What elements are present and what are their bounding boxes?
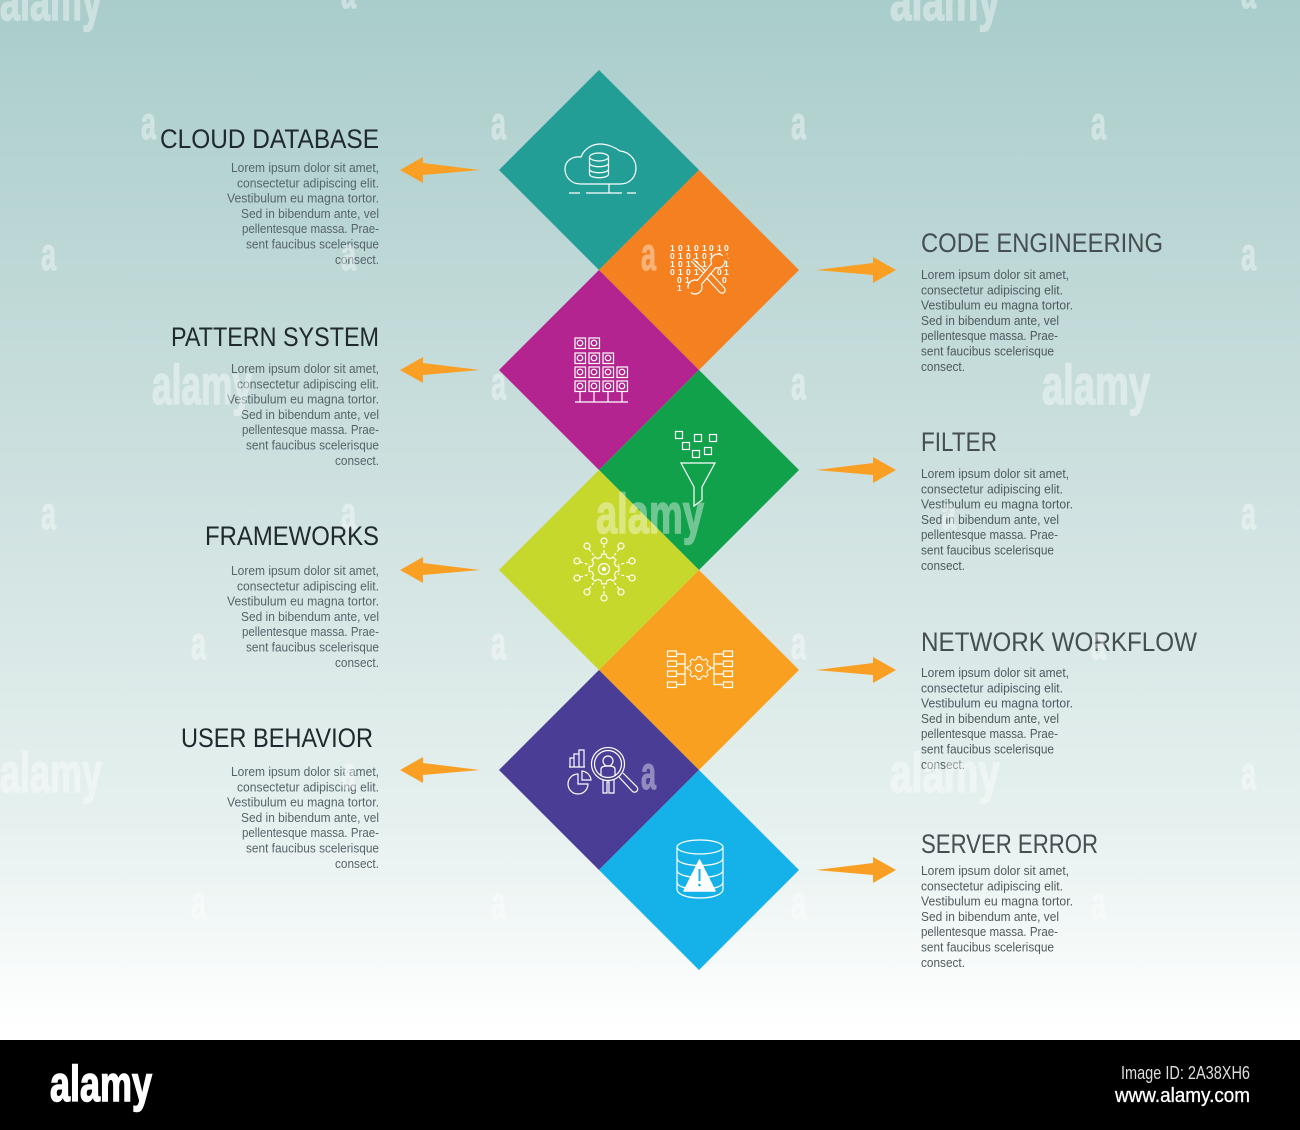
body text: Vestibulum eu magna tortor.: [921, 299, 1073, 313]
body text: Vestibulum eu magna tortor.: [227, 393, 379, 407]
body text: Lorem ipsum dolor sit amet,: [231, 765, 379, 779]
icon: cloud database: [565, 144, 636, 193]
watermark overlay: alamy: [890, 741, 1000, 804]
watermark overlay: a: [791, 97, 806, 149]
icon: pattern grid: [575, 338, 628, 402]
body text: sent faucibus scelerisque: [921, 544, 1054, 558]
watermark overlay: a: [941, 487, 956, 539]
body text: consectetur adipiscing elit.: [921, 879, 1063, 893]
body text: consect.: [921, 360, 965, 374]
image id: Image ID: 2A38XH6: [1121, 1063, 1250, 1083]
diamond: amber: [599, 570, 799, 770]
arrow: [816, 657, 896, 683]
diamond: magenta: [499, 270, 699, 470]
heading: PATTERN SYSTEM: [171, 322, 379, 352]
watermark overlay: alamy: [152, 353, 252, 416]
watermark overlay: a: [1241, 487, 1256, 539]
watermark overlay: a: [1241, 747, 1256, 799]
icon: binary code with tools: 10101010: [670, 243, 729, 253]
body text: consectetur adipiscing elit.: [237, 176, 379, 190]
arrow: [816, 457, 896, 483]
watermark overlay: a: [1091, 877, 1106, 929]
watermark overlay: a: [641, 747, 656, 799]
body text: [227, 161, 379, 267]
body text: pellentesque massa. Prae-: [921, 727, 1058, 741]
body text: sent faucibus scelerisque: [246, 438, 379, 452]
diamond: teal: [499, 70, 699, 270]
body text: pellentesque massa. Prae-: [921, 925, 1058, 939]
icon: binary code with tools: 010: [677, 275, 727, 285]
arrow: [816, 257, 896, 283]
icon: binary code with tools: 01010101: [670, 251, 729, 261]
heading: USER BEHAVIOR: [181, 723, 373, 753]
body text: consect.: [335, 656, 379, 670]
diamond: lime: [499, 470, 699, 670]
watermark overlay: a: [1091, 617, 1106, 669]
body text: Lorem ipsum dolor sit amet,: [921, 666, 1069, 680]
panel: frameworks: [205, 470, 699, 670]
body text: Sed in bibendum ante, vel: [921, 712, 1059, 726]
body text: pellentesque massa. Prae-: [242, 423, 379, 437]
body text: [227, 362, 379, 468]
watermark overlay: a: [1241, 228, 1256, 280]
watermark overlay: a: [491, 877, 506, 929]
website: www.alamy.com: [1114, 1085, 1250, 1107]
body text: Sed in bibendum ante, vel: [241, 207, 379, 221]
heading: NETWORK WORKFLOW: [921, 627, 1197, 657]
body text: pellentesque massa. Prae-: [242, 222, 379, 236]
body text: Vestibulum eu magna tortor.: [227, 595, 379, 609]
body text: [921, 864, 1073, 970]
watermark overlay: a: [41, 228, 56, 280]
body text: sent faucibus scelerisque: [246, 842, 379, 856]
body text: Sed in bibendum ante, vel: [241, 811, 379, 825]
heading: SERVER ERROR: [921, 829, 1098, 859]
body text: [921, 666, 1073, 772]
icon: binary code with tools: 010101: [670, 267, 729, 277]
arrow: [400, 557, 480, 583]
body text: Lorem ipsum dolor sit amet,: [231, 161, 379, 175]
body text: pellentesque massa. Prae-: [921, 528, 1058, 542]
body text: pellentesque massa. Prae-: [242, 625, 379, 639]
body text: Vestibulum eu magna tortor.: [921, 498, 1073, 512]
body text: sent faucibus scelerisque: [246, 640, 379, 654]
panel: pattern system: [171, 270, 699, 470]
body text: consect.: [335, 253, 379, 267]
icon: workflow gear: [668, 651, 732, 688]
body text: consect.: [921, 758, 965, 772]
watermark overlay: alamy: [1042, 353, 1150, 416]
body text: consectetur adipiscing elit.: [921, 283, 1063, 297]
watermark overlay: a: [41, 487, 56, 539]
watermark overlay: alamy: [0, 741, 102, 804]
watermark overlay: a: [341, 228, 356, 280]
watermark overlay: a: [491, 617, 506, 669]
body text: consectetur adipiscing elit.: [237, 780, 379, 794]
panel: server error: [599, 770, 1098, 970]
body text: consect.: [921, 559, 965, 573]
body text: Sed in bibendum ante, vel: [241, 408, 379, 422]
watermark overlay: a: [341, 487, 356, 539]
body text: Vestibulum eu magna tortor.: [227, 796, 379, 810]
arrow: [400, 757, 480, 783]
body text: Lorem ipsum dolor sit amet,: [231, 564, 379, 578]
body text: Sed in bibendum ante, vel: [921, 910, 1059, 924]
body text: consectetur adipiscing elit.: [237, 579, 379, 593]
watermark overlay: [0, 0, 1256, 929]
watermark overlay: a: [491, 97, 506, 149]
arrow: [400, 157, 480, 183]
panel: cloud database: [160, 70, 699, 270]
body text: sent faucibus scelerisque: [921, 742, 1054, 756]
panel: code engineering: [599, 170, 1163, 374]
diamond: blue: [599, 770, 799, 970]
body text: Vestibulum eu magna tortor.: [227, 192, 379, 206]
watermark overlay: a: [341, 747, 356, 799]
watermark overlay: a: [791, 357, 806, 409]
heading: CODE ENGINEERING: [921, 228, 1163, 258]
watermark overlay: a: [1091, 97, 1106, 149]
icon: gear hub: [574, 538, 635, 601]
footer logo: alamy: [50, 1056, 152, 1112]
heading: FRAMEWORKS: [205, 521, 379, 551]
panel: filter: [599, 370, 1073, 573]
watermark overlay: a: [191, 877, 206, 929]
body text: pellentesque massa. Prae-: [242, 826, 379, 840]
heading: CLOUD DATABASE: [160, 124, 379, 154]
icon: database warning: [677, 840, 723, 898]
body text: Vestibulum eu magna tortor.: [921, 895, 1073, 909]
diamond: orange: [599, 170, 799, 370]
icon: binary code with tools: 1: [677, 283, 682, 293]
body text: sent faucibus scelerisque: [921, 344, 1054, 358]
watermark overlay: a: [491, 357, 506, 409]
body text: Lorem ipsum dolor sit amet,: [921, 467, 1069, 481]
body text: [227, 564, 379, 670]
watermark overlay: a: [191, 617, 206, 669]
panel: user behavior: [181, 670, 699, 871]
body text: Lorem ipsum dolor sit amet,: [231, 362, 379, 376]
body text: Sed in bibendum ante, vel: [921, 513, 1059, 527]
icon: user analysis: [568, 748, 638, 794]
body text: consect.: [335, 857, 379, 871]
body text: Vestibulum eu magna tortor.: [921, 697, 1073, 711]
body text: [921, 467, 1073, 573]
body text: pellentesque massa. Prae-: [921, 329, 1058, 343]
body text: [921, 268, 1073, 374]
watermark overlay: a: [791, 617, 806, 669]
watermark overlay: a: [791, 877, 806, 929]
footer bar: [0, 1040, 1300, 1130]
diamond: green: [599, 370, 799, 570]
arrow: [400, 357, 480, 383]
body text: consect.: [921, 956, 965, 970]
body text: consectetur adipiscing elit.: [921, 482, 1063, 496]
panel: network workflow: [599, 570, 1197, 772]
watermark overlay: a: [141, 97, 156, 149]
watermark overlay: a: [641, 228, 656, 280]
body text: sent faucibus scelerisque: [246, 238, 379, 252]
body text: Lorem ipsum dolor sit amet,: [921, 864, 1069, 878]
watermark overlay: alamy: [596, 482, 704, 545]
icon: binary code with tools: [670, 243, 729, 298]
body text: consectetur adipiscing elit.: [921, 681, 1063, 695]
heading: FILTER: [921, 427, 997, 457]
arrow: [816, 857, 896, 883]
body text: Lorem ipsum dolor sit amet,: [921, 268, 1069, 282]
body text: [227, 765, 379, 871]
body text: sent faucibus scelerisque: [921, 940, 1054, 954]
body text: Sed in bibendum ante, vel: [921, 314, 1059, 328]
body text: Sed in bibendum ante, vel: [241, 610, 379, 624]
diamond: purple: [499, 670, 699, 870]
icon: binary code with tools: 1010101: [670, 259, 729, 269]
icon: funnel: [676, 432, 716, 506]
body text: consectetur adipiscing elit.: [237, 377, 379, 391]
body text: consect.: [335, 454, 379, 468]
